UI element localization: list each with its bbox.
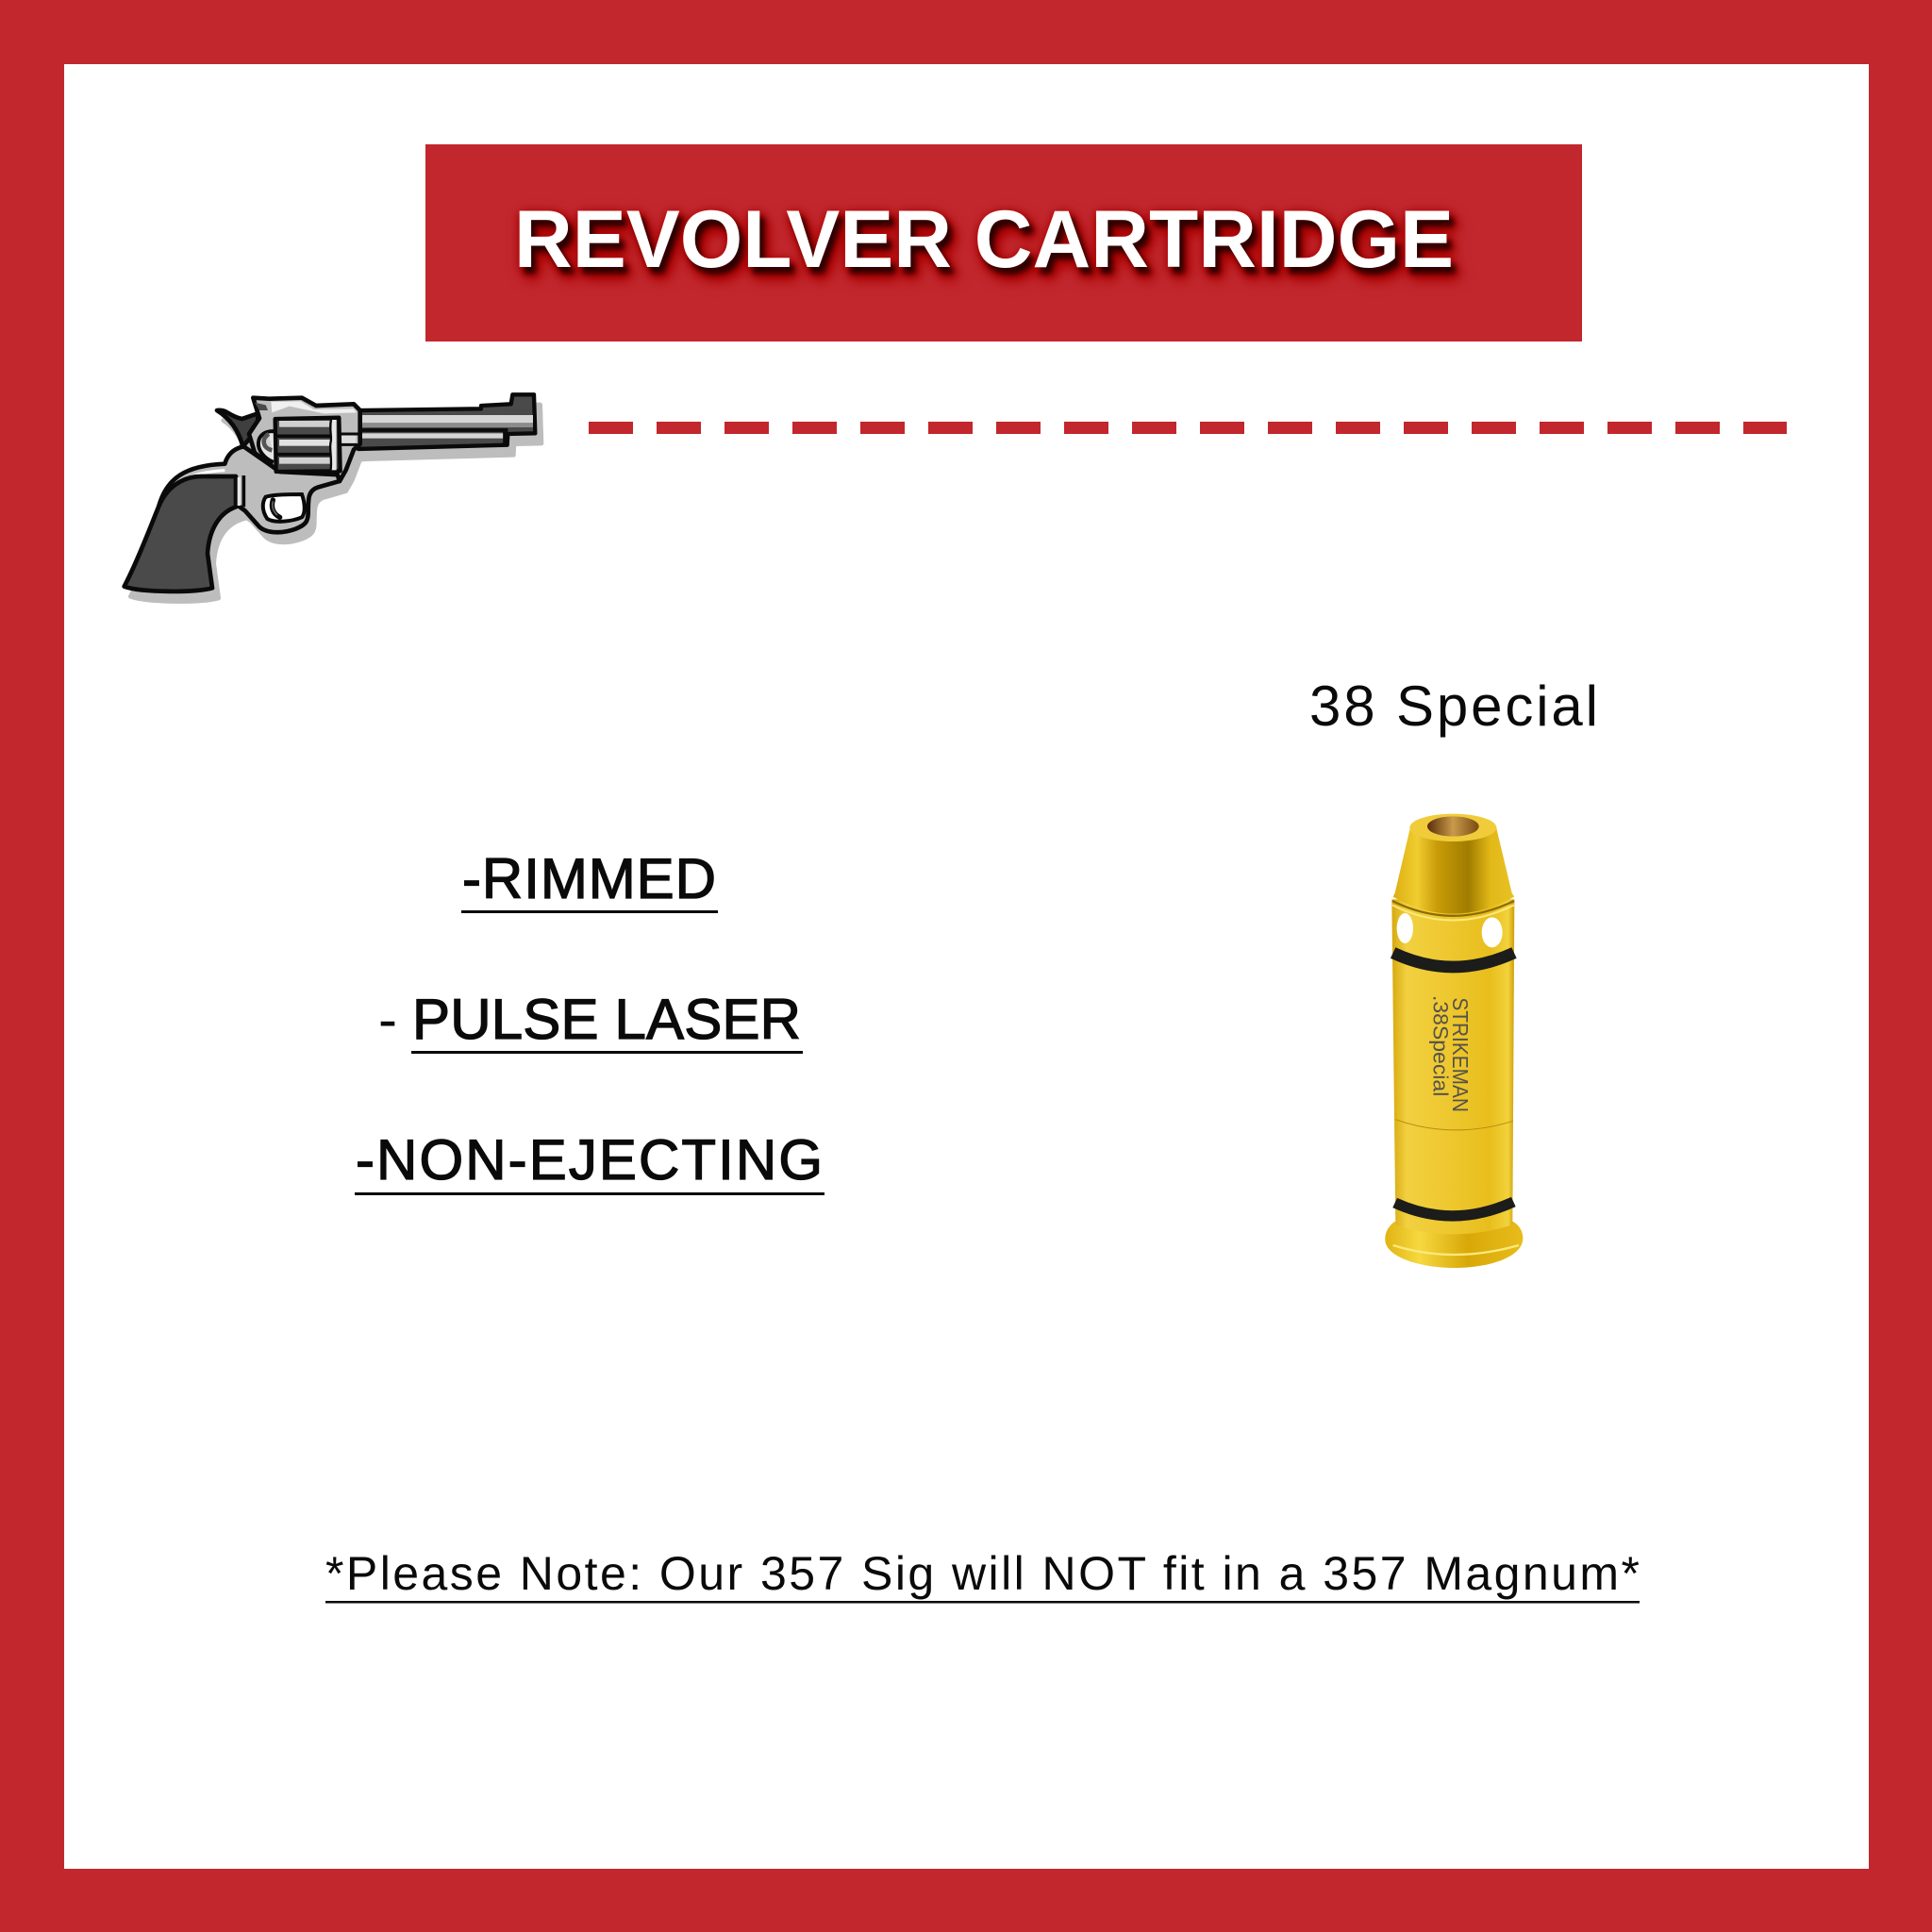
bullet base	[1385, 1222, 1523, 1268]
feature list	[355, 847, 824, 1195]
revolver grip	[125, 476, 236, 591]
bullet nose	[1393, 827, 1514, 914]
footnote: *Please Note: Our 357 Sig will NOT fit in a 357 Magnum*	[325, 1547, 1640, 1600]
feature: rimmed: -RIMMED	[462, 847, 716, 910]
bore	[1427, 816, 1479, 837]
engraved text: .38Special	[1428, 995, 1452, 1096]
feature: non-ejecting: -NON-EJECTING	[356, 1128, 823, 1191]
dashed line	[589, 422, 1787, 434]
engraved text	[1428, 995, 1473, 1112]
laser holes	[1397, 913, 1413, 943]
label: 38 Special: 38 Special	[1309, 675, 1598, 738]
shoulder ring	[1392, 901, 1514, 916]
bullet body	[1391, 899, 1514, 1234]
top strap	[249, 398, 360, 481]
revolver frame	[158, 446, 340, 532]
bullet tip	[1409, 814, 1496, 841]
barrel	[358, 394, 535, 449]
recoil shield	[258, 431, 275, 462]
engraved text: STRIKEMAN	[1448, 997, 1473, 1112]
title banner	[425, 144, 1582, 341]
revolver shadow	[130, 405, 541, 602]
grip highlight	[163, 471, 225, 505]
bullet image	[1385, 814, 1523, 1268]
feature: pulse laser: -	[378, 988, 397, 1051]
o-rings	[1393, 953, 1514, 967]
title: REVOLVER CARTRIDGE	[514, 194, 1454, 285]
hammer	[217, 410, 258, 446]
feature: pulse laser: PULSE LASER	[412, 988, 801, 1051]
cylinder	[275, 418, 341, 472]
trigger guard	[263, 494, 305, 522]
icon: revolver	[125, 394, 541, 602]
